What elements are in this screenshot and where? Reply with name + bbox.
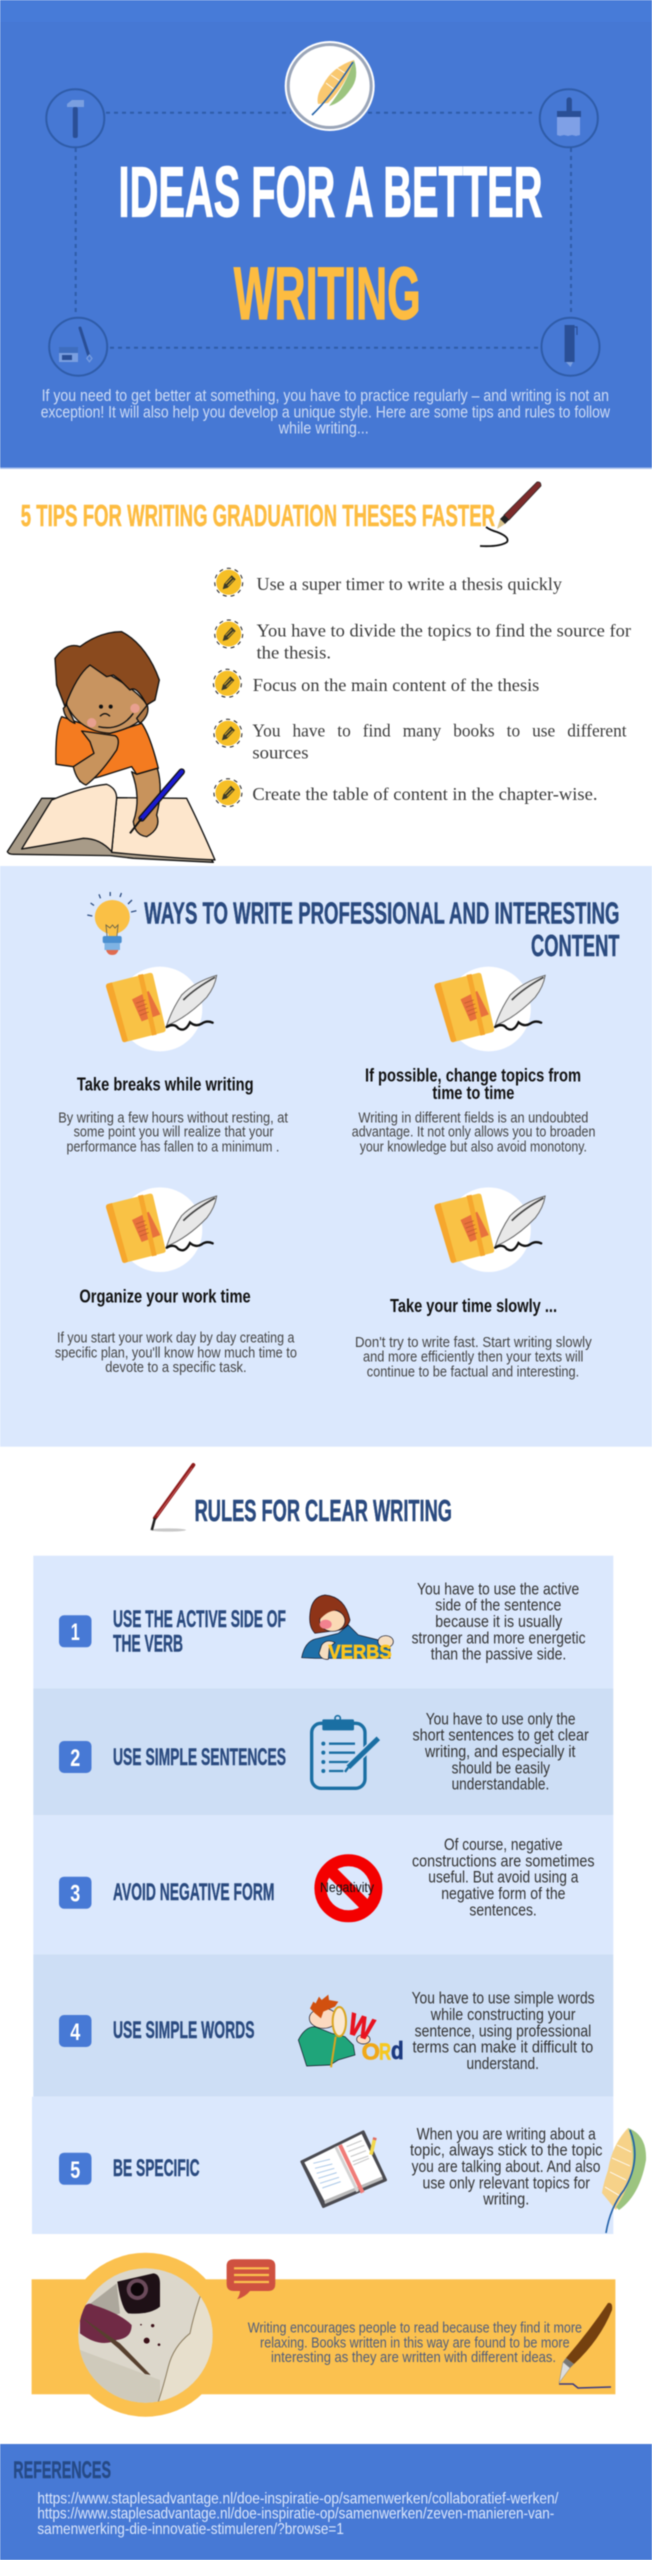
illustration: boy writing	[7, 632, 215, 862]
reference links: samenwerking-die-innovatie-stimuleren/?browse=1	[37, 2521, 344, 2538]
rule text	[410, 2124, 603, 2209]
way text: specific plan, you'll know how much time to	[55, 1344, 297, 1361]
rule text: should be easily	[452, 1758, 550, 1777]
rule heading: USE THE ACTIVE SIDE OF	[113, 1606, 286, 1633]
tip 1: Use a super timer to write a thesis quickly	[256, 574, 562, 594]
intro text: while writing...	[278, 418, 369, 437]
rule text: understand.	[466, 2054, 539, 2073]
tip 1	[215, 568, 562, 596]
tip 4: sources	[252, 742, 308, 762]
icon: notebook and quill	[434, 967, 545, 1051]
tip 4	[214, 719, 627, 762]
number badge	[59, 2015, 92, 2047]
tip 5: Create the table of content in the chapter-wise.	[252, 784, 598, 804]
way text	[55, 1330, 297, 1376]
way text: advantage. It not only allows you to broaden	[352, 1124, 595, 1141]
tip 3: Focus on the main content of the thesis	[253, 675, 539, 695]
icon: boy with magnifier and word: d	[391, 2037, 404, 2065]
heading	[144, 895, 620, 963]
rule heading: USE SIMPLE SENTENCES	[113, 1744, 286, 1771]
tip 2: You have to divide the topics to find the source for	[256, 621, 631, 641]
icon: pen and box	[49, 318, 107, 376]
way text: continue to be factual and interesting.	[367, 1363, 579, 1380]
number badge	[59, 1877, 92, 1909]
number badge: 4	[70, 2019, 81, 2046]
way title: Take breaks while writing	[77, 1075, 254, 1095]
panel: references	[0, 2444, 652, 2560]
rule text	[412, 1835, 595, 1919]
rule text: than the passive side.	[431, 1645, 566, 1664]
rule heading: BE SPECIFIC	[113, 2155, 200, 2182]
rule text: sentences.	[469, 1900, 537, 1919]
rule text: writing.	[482, 2190, 529, 2209]
rule text: side of the sentence	[435, 1596, 561, 1615]
icon: boy with magnifier and word: W	[344, 2007, 378, 2047]
way text: some point you will realize that your	[74, 1124, 274, 1141]
rule 4	[33, 1954, 613, 2097]
panel: ways to write	[0, 866, 652, 1447]
rule 5	[32, 2097, 646, 2234]
way text: Don't try to write fast. Start writing slowly	[355, 1334, 592, 1351]
callout text	[248, 2320, 582, 2366]
rule text: you are talking about. And also	[412, 2157, 600, 2176]
intro text	[41, 386, 611, 437]
rule heading: AVOID NEGATIVE FORM	[113, 1879, 274, 1906]
rule text	[412, 1579, 586, 1664]
number badge: 3	[70, 1880, 80, 1908]
rule 1	[33, 1556, 613, 1688]
icon: clipboard	[312, 1716, 378, 1788]
panel: rules for clear writing	[32, 1465, 646, 2234]
icon: no negativity sign: Negativity	[320, 1879, 374, 1895]
rule heading: USE SIMPLE WORDS	[113, 2017, 254, 2044]
way 1	[58, 967, 289, 1156]
icon: boy with magnifier and word: O	[362, 2038, 380, 2064]
icon: notebook and quill	[106, 1187, 217, 1272]
number badge	[59, 1615, 92, 1647]
icon: notebook and quill	[106, 967, 217, 1051]
icon: marker	[542, 318, 600, 376]
way text: your knowledge but also avoid monotony.	[360, 1139, 587, 1156]
icon: red pen	[150, 1465, 193, 1532]
number badge: 5	[70, 2157, 80, 2184]
rule text: When you are writing about a	[417, 2124, 596, 2143]
rule text: understandable.	[452, 1775, 549, 1794]
panel: five tips	[7, 482, 631, 862]
heading: RULES FOR CLEAR WRITING	[195, 1494, 452, 1528]
rule text	[412, 1989, 595, 2073]
way text: Writing in different fields is an undoubted	[358, 1109, 588, 1126]
rule text: negative form of the	[441, 1884, 566, 1903]
panel: header	[0, 0, 652, 469]
tip 2	[215, 620, 631, 662]
rule text: You have to use simple words	[412, 1989, 595, 2008]
way text	[355, 1334, 592, 1380]
rule heading: THE VERB	[113, 1630, 183, 1657]
rule text: constructions are sometimes	[412, 1851, 595, 1870]
way 3	[55, 1187, 297, 1376]
icon: boy with magnifier and word: R	[379, 2038, 391, 2064]
icon: hammer	[46, 89, 104, 147]
icon: boy with magnifier and word	[298, 1995, 404, 2067]
icon: brown pen	[559, 2303, 612, 2388]
title accent: WRITING	[234, 252, 421, 335]
icon: notebook and quill	[434, 1187, 545, 1272]
number badge: 2	[70, 1745, 80, 1772]
icon: light bulb	[87, 892, 136, 955]
rule 3	[33, 1815, 613, 1954]
reference links: https://www.staplesadvantage.nl/doe-inspiratie-op/samenwerken/zeven-manieren-van-	[37, 2506, 554, 2523]
rule text: sentence, using professional	[415, 2021, 591, 2040]
icon: feather badge	[285, 41, 375, 131]
number badge: 1	[71, 1619, 80, 1646]
photo: ink bottle and quill	[77, 2267, 217, 2407]
way title	[365, 1066, 581, 1103]
icon: no negativity sign	[320, 1860, 376, 1916]
rule heading	[113, 1606, 286, 1657]
tip 4: You have to find many books to use different	[252, 721, 627, 741]
rule text: stronger and more energetic	[412, 1628, 586, 1647]
number badge	[59, 2153, 92, 2185]
way text: performance has fallen to a minimum .	[66, 1139, 279, 1156]
rule text: useful. But avoid using a	[428, 1868, 579, 1887]
number badge	[59, 1741, 92, 1773]
way text: and more efficiently then your texts will	[363, 1349, 583, 1366]
way text: If you start your work day by day creating a	[57, 1330, 295, 1347]
rule text: short sentences to get clear	[412, 1726, 589, 1745]
reference links: https://www.staplesadvantage.nl/doe-inspiratie-op/samenwerken/collaboratief-werken/	[37, 2490, 559, 2507]
rule text: terms can make it difficult to	[412, 2038, 593, 2057]
tip 2: the thesis.	[256, 642, 331, 662]
way title: If possible, change topics from	[365, 1066, 581, 1086]
icon: open book	[302, 2132, 386, 2207]
icon: feather	[602, 2128, 646, 2233]
rule text: You have to use only the	[426, 1709, 576, 1728]
tip 5	[214, 779, 598, 807]
way title: time to time	[432, 1083, 514, 1103]
callout text: Writing encourages people to read because they find it more	[248, 2320, 582, 2337]
way text	[58, 1109, 289, 1156]
icon: paint brush	[540, 89, 598, 147]
way text: By writing a few hours without resting, at	[58, 1109, 289, 1126]
reference links	[37, 2490, 559, 2538]
way 4	[355, 1187, 592, 1380]
rule text	[412, 1709, 589, 1794]
heading: REFERENCES	[13, 2457, 111, 2484]
rule text: use only relevant topics for	[422, 2173, 590, 2192]
rule 2	[33, 1688, 613, 1815]
icon: fountain pen	[480, 482, 541, 546]
callout text: relaxing. Books written in this way are found to be more	[260, 2334, 570, 2351]
icon: verbs woman	[302, 1595, 393, 1663]
rule text: You have to use the active	[417, 1579, 579, 1598]
callout text: interesting as they are written with different ideas.	[271, 2349, 556, 2366]
rule text: while constructing your	[430, 2005, 576, 2024]
way title: Organize your work time	[79, 1287, 251, 1307]
icon: speech bubble	[227, 2259, 275, 2299]
tip 3	[213, 669, 539, 697]
way text	[352, 1109, 595, 1156]
rule text: Of course, negative	[444, 1835, 563, 1854]
rule text: writing, and especially it	[424, 1742, 576, 1761]
panel: callout banner	[32, 2253, 615, 2417]
way title: Take your time slowly ...	[390, 1296, 557, 1316]
icon: verbs woman: VERBS	[328, 1642, 392, 1663]
rule text: topic, always stick to the topic	[410, 2141, 603, 2160]
rule text: because it is usually	[435, 1612, 563, 1631]
way 2	[352, 967, 595, 1156]
way text: devote to a specific task.	[105, 1359, 247, 1376]
